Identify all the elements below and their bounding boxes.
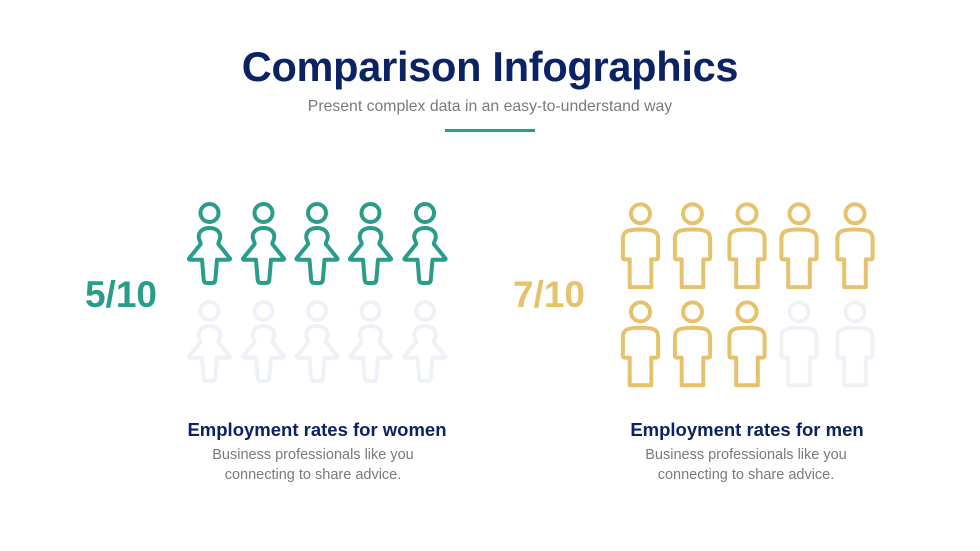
men fraction: 7/10 <box>513 274 585 315</box>
title underline <box>445 129 535 132</box>
women description: connecting to share advice. <box>225 467 401 483</box>
women description: Business professionals like you <box>212 447 414 463</box>
men inactive icons <box>781 302 873 385</box>
women inactive row <box>189 302 446 381</box>
men heading: Employment rates for men <box>630 419 864 440</box>
title: Comparison Infographics <box>242 43 738 90</box>
men description <box>645 447 847 483</box>
subtitle: Present complex data in an easy-to-understand way <box>308 98 672 115</box>
women employed row <box>189 204 446 283</box>
women fraction: 5/10 <box>85 274 157 315</box>
men description: Business professionals like you <box>645 447 847 463</box>
women description <box>212 447 414 483</box>
men description: connecting to share advice. <box>658 467 834 483</box>
men employed icons <box>623 204 873 385</box>
women heading: Employment rates for women <box>187 419 447 440</box>
